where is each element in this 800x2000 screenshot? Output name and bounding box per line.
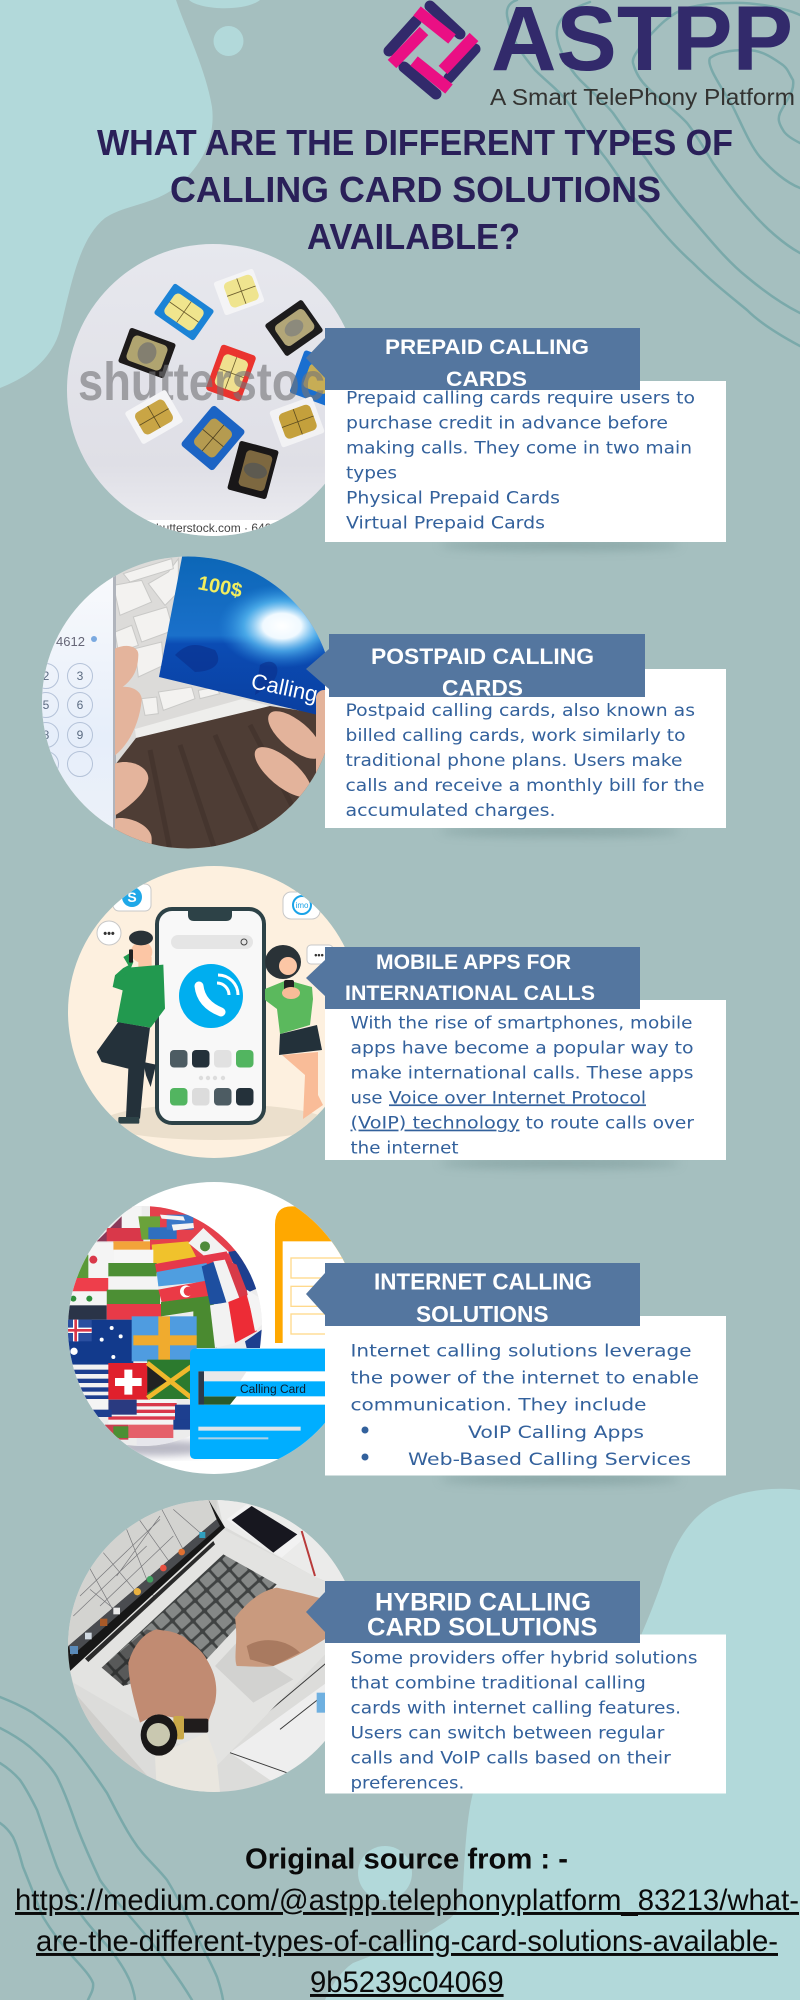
heading banner (325, 947, 640, 1009)
body text: calls and VoIP calls based on their (350, 1749, 671, 1769)
body text: communication. They include (350, 1396, 646, 1416)
laptop body (70, 1671, 280, 1752)
image: people with smartphone: ••• (103, 928, 115, 940)
image: flag globe and calling card (68, 1182, 345, 1474)
body text: (VoIP) technology (350, 1114, 520, 1134)
icon: logo diamond (389, 6, 475, 94)
body text: that combine traditional calling (350, 1674, 646, 1694)
calling card (190, 1348, 325, 1459)
heading banner: HYBRID CALLING (375, 1588, 591, 1616)
source link: are-the-different-types-of-calling-card-solutions-available- (36, 1925, 778, 1958)
body text: Voice over Internet Protocol (389, 1088, 646, 1108)
body text: Prepaid calling cards require users to (346, 389, 695, 409)
wood table (115, 706, 330, 852)
body text: With the rise of smartphones, mobile (350, 1014, 692, 1034)
body text: Postpaid calling cards, also known as (346, 701, 695, 721)
body text: accumulated charges. (346, 801, 556, 821)
speech bubbles (113, 884, 151, 911)
contour lines: top right (507, 0, 800, 346)
bezel (60, 1499, 225, 1671)
watch (180, 1719, 208, 1733)
arrow (306, 1592, 325, 1632)
heading banner (325, 1263, 640, 1327)
image: SIM cards: shutterstock.com · 640995 (150, 521, 292, 535)
heading banner: SOLUTIONS (416, 1301, 548, 1327)
body text: cards with internet calling features. (350, 1698, 681, 1718)
image: hand holding calling card: 4612 (56, 634, 85, 649)
arrow (306, 1273, 325, 1315)
source link (15, 1884, 799, 1999)
arrow (306, 338, 325, 378)
phone (157, 909, 264, 1123)
heading banner: CARD SOLUTIONS (367, 1614, 598, 1642)
text card (325, 381, 726, 542)
image: hands on laptop (68, 1500, 345, 1792)
card shadow (440, 1474, 680, 1484)
image: hand holding calling card: 100$ (196, 572, 244, 602)
body text: apps have become a popular way to (350, 1038, 694, 1058)
text card (325, 1000, 726, 1160)
image: people with smartphone: imo (296, 901, 309, 910)
fingers right (254, 690, 325, 796)
source attribution (15, 1844, 799, 1999)
heading banner (329, 634, 645, 700)
heading banner (325, 328, 640, 391)
decorative blob: bottom right (325, 1489, 800, 2000)
body text: making calls. They come in two main (346, 439, 692, 459)
image credit strip (146, 520, 280, 536)
image: people with smartphone: ••• (314, 950, 324, 960)
woman (282, 1052, 323, 1119)
keyboard (102, 1554, 277, 1686)
body text: to route calls over (526, 1114, 694, 1134)
panel: mobile apps for international calls (60, 860, 726, 1168)
body text: use (350, 1088, 382, 1108)
decorative dot: top (214, 26, 244, 56)
body text: Internet calling solutions leverage (350, 1342, 692, 1362)
source link: https://medium.com/@astpp.telephonyplatform_83213/what- (15, 1884, 799, 1917)
image: flag globe and calling card: Calling Card (240, 1382, 306, 1396)
panel: postpaid calling cards (34, 552, 726, 862)
arrow (306, 649, 329, 689)
dock icons (70, 1532, 205, 1654)
body text: Web-Based Calling Services (408, 1450, 691, 1470)
body text: purchase credit in advance before (346, 414, 668, 434)
image: hand holding calling card: 3 (77, 669, 84, 683)
logo: ASTPP (389, 0, 795, 110)
body text (346, 701, 704, 821)
heading banner: INTERNATIONAL CALLS (345, 982, 595, 1005)
image: hand holding calling card (42, 556, 326, 848)
heading banner: INTERNET CALLING (374, 1269, 592, 1295)
Jamaica (147, 1360, 192, 1399)
text card (325, 669, 726, 828)
Swiss (108, 1363, 150, 1400)
body text: types (346, 464, 397, 484)
title: WHAT ARE THE DIFFERENT TYPES OF (97, 122, 733, 163)
keyboard keys (113, 559, 220, 715)
text card (325, 1634, 726, 1794)
phone screen (42, 576, 115, 829)
image: hand holding calling card: 2 (43, 669, 50, 683)
body text: Virtual Prepaid Cards (346, 514, 545, 534)
heading banner: PREPAID CALLING (385, 336, 589, 359)
sleeve (155, 1733, 220, 1793)
globe (68, 1206, 262, 1446)
arrow (306, 960, 325, 996)
image: hand holding calling card: 5 (43, 698, 50, 712)
body text (346, 389, 695, 534)
decorative blob: top small (189, 0, 260, 8)
heading banner: MOBILE APPS FOR (376, 951, 571, 974)
Sweden (132, 1316, 197, 1361)
card shadow (440, 826, 680, 836)
heading banner: CARDS (442, 676, 523, 700)
body text: preferences. (350, 1773, 464, 1793)
fingers left (115, 646, 152, 852)
body text (350, 1648, 698, 1793)
body text: the power of the internet to enable (350, 1368, 699, 1388)
contour lines: bottom left (0, 1697, 223, 2000)
decorative dot: bottom (358, 1846, 412, 1900)
panel: hybrid calling card solutions (60, 1496, 726, 1796)
title: AVAILABLE? (307, 216, 520, 257)
card (159, 556, 326, 714)
phone on desk (227, 1504, 305, 1558)
keyboard lower edge (135, 699, 270, 738)
source heading: Original source from : - (245, 1844, 568, 1876)
title (97, 122, 733, 257)
body text (350, 1342, 699, 1470)
body text: the internet (350, 1138, 459, 1158)
trackpad (215, 1643, 293, 1703)
Greece (72, 1364, 108, 1387)
source link: 9b5239c04069 (310, 1966, 504, 1999)
panel: internet calling solutions (20, 1178, 726, 1484)
body text: Some providers offer hybrid solutions (350, 1648, 698, 1668)
orange form (275, 1206, 345, 1343)
logo tagline: A Smart TelePhony Platform (490, 84, 795, 110)
card shadow (440, 540, 680, 550)
title: CALLING CARD SOLUTIONS (170, 169, 661, 210)
watermark: shutterstock (78, 352, 351, 412)
Australia (60, 1320, 133, 1365)
body text: billed calling cards, work similarly to (346, 726, 686, 746)
body text: calls and receive a monthly bill for the (346, 776, 704, 796)
heading banner (325, 1581, 640, 1643)
body text: Physical Prepaid Cards (346, 489, 560, 509)
image: people with smartphone: S (127, 889, 137, 905)
image: hand holding calling card: 6 (77, 698, 84, 712)
image: hand holding calling card: 8 (43, 728, 50, 742)
body text: VoIP Calling Apps (468, 1423, 644, 1443)
card shadow (440, 1158, 680, 1168)
decorative blob: top left (0, 0, 213, 388)
body text: Users can switch between regular (350, 1724, 664, 1744)
left hand (128, 1629, 216, 1726)
right hand (235, 1588, 330, 1667)
heading banner: CARDS (446, 368, 527, 391)
image: hand holding calling card: 9 (77, 728, 84, 742)
panel: prepaid calling cards (60, 240, 726, 550)
laptop screen (60, 1496, 217, 1646)
image: SIM cards (67, 244, 346, 536)
USA (108, 1400, 150, 1401)
body text (350, 1014, 694, 1158)
man (97, 931, 165, 1124)
body text: make international calls. These apps (350, 1063, 694, 1083)
ground (111, 1106, 318, 1140)
desk papers (218, 1500, 345, 1581)
body text: traditional phone plans. Users make (346, 751, 682, 771)
image: people with smartphone (68, 866, 345, 1158)
heading banner: POSTPAID CALLING (371, 644, 594, 669)
text card (325, 1316, 726, 1476)
image: hand holding calling card: Calling (249, 668, 320, 707)
